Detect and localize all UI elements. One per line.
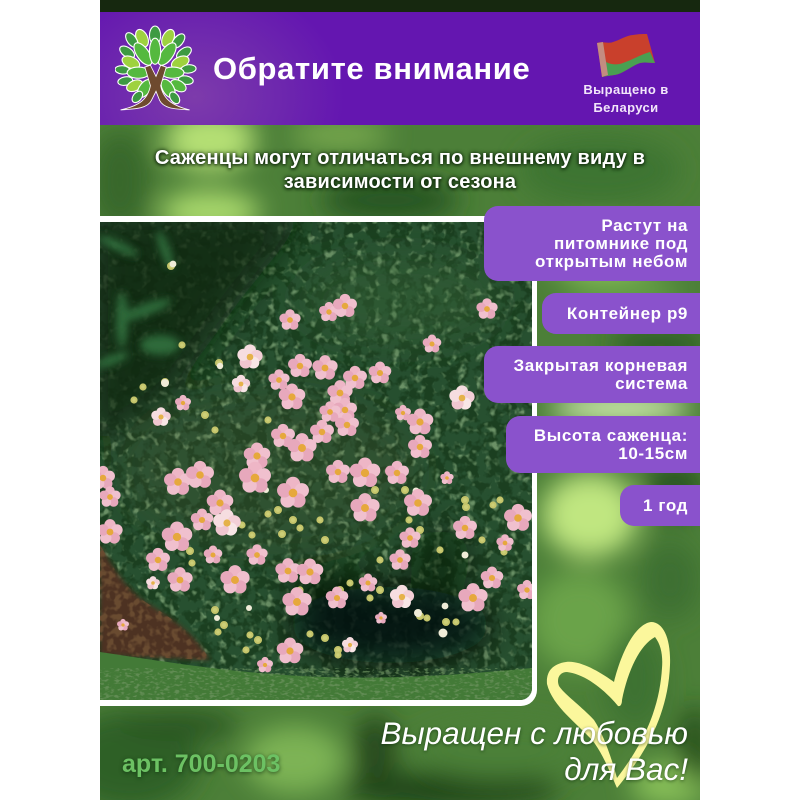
subheading: Саженцы могут отличаться по внешнему виду в bbox=[155, 147, 645, 169]
slogan: Выращен с любовью bbox=[380, 715, 688, 751]
icon: flag of Belarus bbox=[597, 34, 655, 77]
white photo frame bbox=[100, 216, 537, 706]
callout: grown outdoors: питомнике под bbox=[554, 234, 688, 252]
flag caption: Выращено в bbox=[583, 82, 669, 97]
photo: flowering potentilla shrub bbox=[100, 216, 537, 706]
article number: арт. 700-0203 bbox=[122, 750, 280, 778]
flag caption bbox=[583, 82, 669, 115]
background: blurred green foliage bbox=[100, 0, 700, 800]
pink flowers bbox=[91, 294, 537, 672]
callout: seedling height: 10-15см bbox=[618, 444, 688, 462]
callout: seedling height: Высота саженца: bbox=[534, 426, 688, 444]
callout: grown outdoors: Растут на bbox=[601, 216, 688, 234]
icon: tree logo bbox=[115, 26, 197, 110]
subheading bbox=[152, 147, 647, 193]
callout: age: 1 год bbox=[643, 496, 688, 514]
callout: age bbox=[620, 485, 700, 526]
subheading: зависимости от сезона bbox=[284, 171, 516, 193]
callout: closed root system: система bbox=[615, 374, 688, 392]
mulch bbox=[100, 545, 210, 662]
slogan: для Вас! bbox=[564, 751, 688, 787]
lawn bbox=[100, 652, 532, 700]
blurred background leaves bbox=[93, 229, 180, 371]
yellow buds bbox=[131, 263, 507, 658]
purple header band bbox=[100, 12, 700, 125]
callout: seedling height bbox=[506, 416, 700, 473]
white buds bbox=[161, 261, 468, 638]
callout: container size: Контейнер р9 bbox=[567, 304, 688, 322]
callout: closed root system bbox=[484, 346, 700, 403]
icon: yellow heart bbox=[546, 622, 670, 788]
callout: closed root system: Закрытая корневая bbox=[513, 356, 688, 374]
callout: grown outdoors: открытым небом bbox=[535, 252, 688, 270]
shadow and light masses bbox=[90, 212, 500, 663]
callout: grown outdoors bbox=[484, 206, 700, 281]
flag caption: Беларуси bbox=[593, 100, 659, 115]
callout: container size bbox=[542, 293, 700, 334]
slogan bbox=[380, 715, 688, 787]
heading: Обратите внимание bbox=[213, 51, 530, 86]
